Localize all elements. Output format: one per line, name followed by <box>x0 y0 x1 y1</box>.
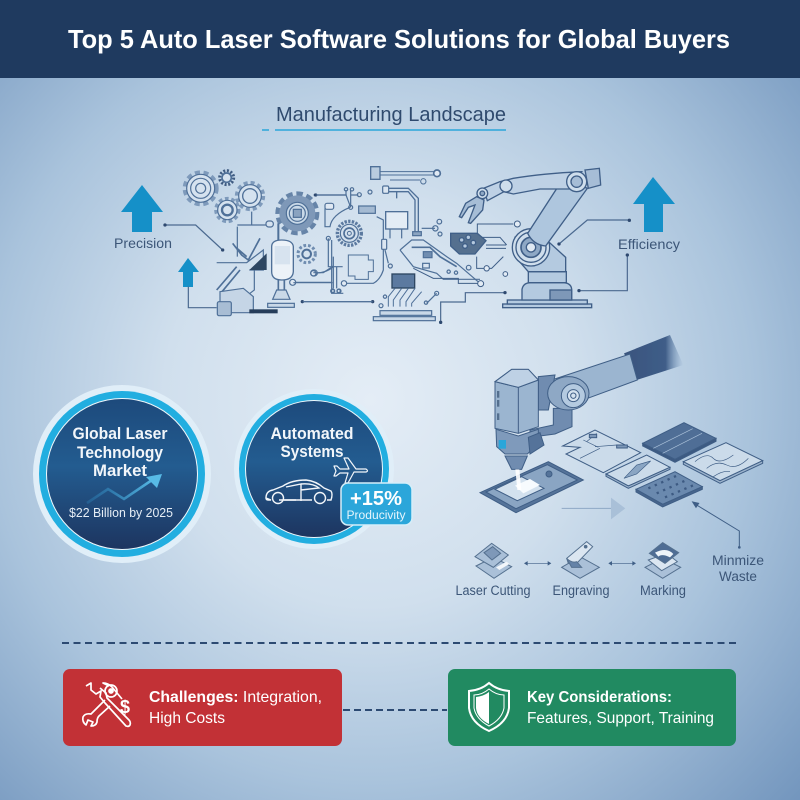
panel: key considerations: Features, Support, Training <box>527 710 714 727</box>
upper bracket <box>368 167 440 268</box>
label: laser cutting: Laser Cutting <box>456 583 530 598</box>
diagram: gears and mechanical circuit left <box>163 171 374 316</box>
icon: precision arrow large <box>121 185 163 232</box>
robot gripper <box>459 197 484 223</box>
double arrow 1 <box>525 562 551 565</box>
leader lines to efficiency <box>439 219 631 324</box>
arm tube <box>624 335 683 380</box>
productivity badge: +15% <box>350 488 402 510</box>
label: precision: Precision <box>114 235 172 251</box>
title band <box>0 0 800 78</box>
double arrow 2 <box>609 562 635 565</box>
market value: $22 Billion by 2025 <box>69 505 173 520</box>
diagram: laser head <box>475 335 763 578</box>
rear bracket <box>530 375 572 437</box>
diagram: robot arm <box>413 168 631 324</box>
icon: laser cutting <box>475 543 512 578</box>
icon: dollar sign: $ <box>120 697 130 717</box>
lower leader <box>303 300 373 303</box>
growth arrow <box>87 474 162 503</box>
waste arrow <box>693 502 741 549</box>
icon: precision arrow small <box>178 258 199 287</box>
icon: car <box>266 480 332 504</box>
label: marking: Marking <box>640 583 686 598</box>
hex circuit module <box>400 219 480 283</box>
leader lines <box>163 193 374 308</box>
sheet: cut pieces <box>563 430 641 473</box>
icon: plane <box>334 458 368 483</box>
title: Top 5 Auto Laser Software Solutions for Global Buyers <box>68 24 730 54</box>
productivity badge: Producivity <box>346 510 406 522</box>
robot joint <box>512 229 550 266</box>
top gear connectors <box>293 188 383 293</box>
productivity badge <box>341 483 412 525</box>
robot joints <box>477 172 587 199</box>
microchip <box>373 274 439 321</box>
robot shoulder <box>515 237 566 272</box>
label: minimize waste <box>712 553 764 584</box>
icon: tools and dollar <box>83 683 130 726</box>
robot forearm <box>483 172 582 201</box>
small gear <box>298 245 315 263</box>
arm segment <box>552 354 637 407</box>
laser beam <box>515 469 521 490</box>
label: efficiency: Efficiency <box>618 236 680 252</box>
small robot tool <box>217 212 278 316</box>
stat circle: global laser technology market <box>33 385 211 563</box>
stat circle: automated systems <box>234 389 412 549</box>
cylinder <box>268 223 294 307</box>
chip outline <box>348 255 373 279</box>
icon: shield <box>469 683 509 731</box>
sheet: dotted <box>636 472 702 507</box>
automated text: Automated <box>270 425 354 443</box>
fixture module <box>413 221 520 287</box>
icon: marking <box>645 543 681 578</box>
label: engraving: Engraving <box>552 583 610 598</box>
gear cluster <box>185 171 263 221</box>
sheet: diamond <box>606 455 670 488</box>
work plate <box>480 462 583 513</box>
market text: Global Laser <box>72 425 168 443</box>
robot upper arm <box>528 178 587 246</box>
icon: efficiency arrow <box>633 177 675 232</box>
section heading: manufacturing landscape: Manufacturing Landscape <box>276 104 506 126</box>
sheet: dark <box>643 423 716 462</box>
robot base <box>503 272 592 308</box>
panel: key considerations <box>448 669 736 746</box>
process arrow <box>562 498 625 519</box>
large mid gear <box>337 221 361 245</box>
laser head body <box>495 369 544 469</box>
icon: engraving <box>562 542 599 578</box>
stat circle: automated systems: Systems <box>280 443 344 461</box>
label: minimize waste: Minmize <box>712 553 764 568</box>
dark gear <box>278 194 317 233</box>
label: minimize waste: Waste <box>719 569 757 584</box>
diagram: circuit board centre <box>293 167 480 321</box>
challenges text: Challenges: Integration, <box>149 689 322 706</box>
considerations text: Key Considerations: <box>527 689 672 706</box>
stat circle: global laser technology market: Technology <box>77 444 164 462</box>
sheet: wavy <box>683 443 763 483</box>
stat circle: global laser technology market: Market <box>93 462 147 480</box>
arm joint <box>548 377 589 410</box>
panel: challenges: High Costs <box>149 710 225 727</box>
panel: challenges <box>63 669 342 746</box>
robot end cap <box>585 168 601 188</box>
circuit lines <box>293 240 343 293</box>
